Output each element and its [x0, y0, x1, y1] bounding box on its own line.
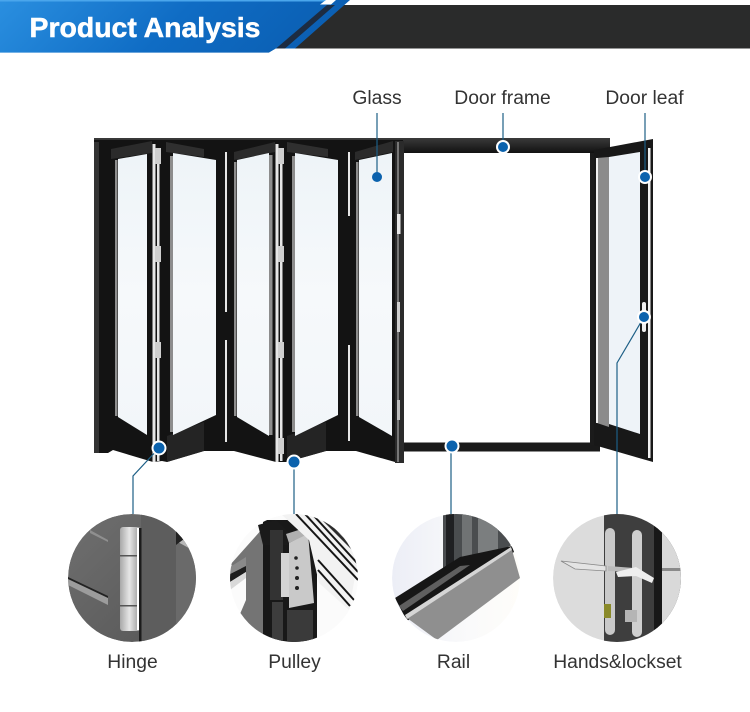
- folding door diagram: [94, 138, 653, 463]
- top labels: Glass: [352, 88, 402, 109]
- bottom labels: Rail: [437, 652, 470, 673]
- folded door leaves: [94, 140, 404, 463]
- glass edge highlights: [115, 155, 358, 435]
- header banner: [0, 0, 750, 53]
- bottom labels: Hands&lockset: [553, 652, 682, 673]
- open door leaf: [594, 139, 653, 462]
- bottom labels: [107, 652, 682, 673]
- top labels: Door frame: [454, 88, 551, 109]
- bottom labels: Pulley: [268, 652, 321, 673]
- detail: handle and lockset: [553, 514, 682, 642]
- door frame: [94, 138, 610, 452]
- detail: pulley: [230, 514, 358, 642]
- top labels: [352, 88, 684, 109]
- callout lines: [133, 113, 645, 514]
- bottom labels: Hinge: [107, 652, 158, 673]
- end stile with lock: [395, 141, 404, 463]
- top labels: Door leaf: [605, 88, 684, 109]
- hinge strips: [152, 144, 350, 462]
- title: Product Analysis: [30, 12, 260, 43]
- callout dots: [152, 141, 651, 468]
- glass panes: [118, 153, 392, 436]
- detail: hinge: [68, 514, 200, 642]
- detail: rail: [392, 514, 520, 642]
